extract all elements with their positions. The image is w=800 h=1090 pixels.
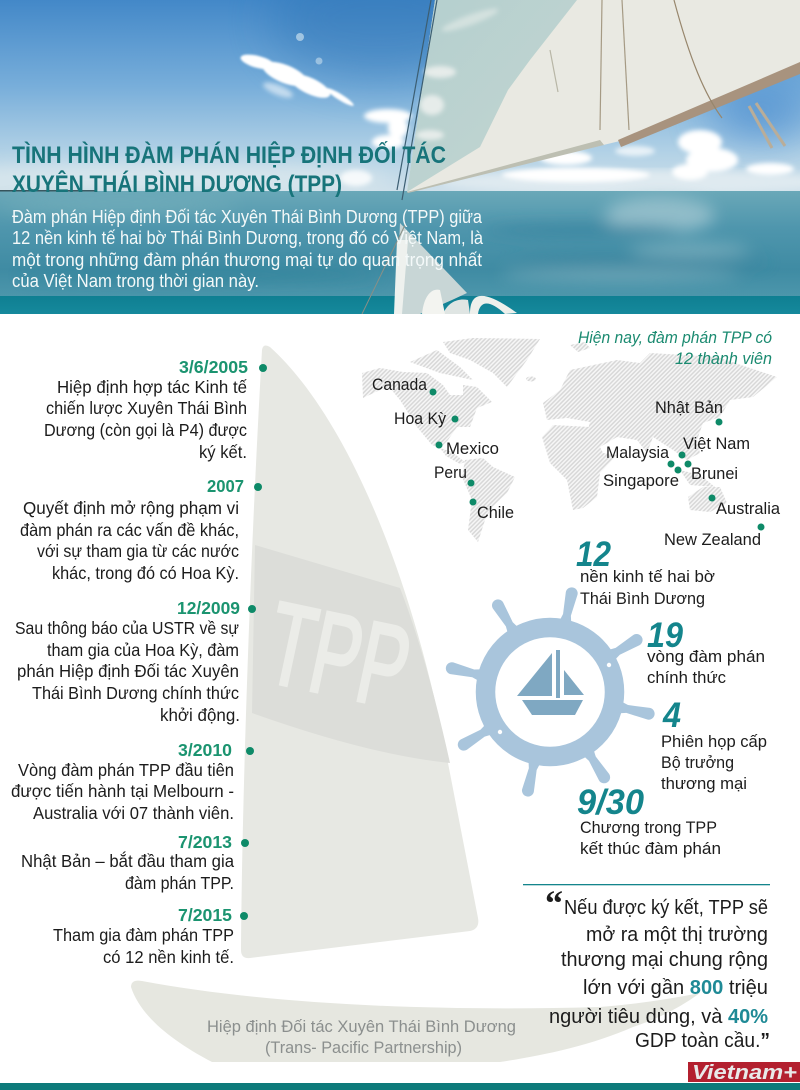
quote: thương mại chung rộng (561, 948, 768, 971)
stat 12: Thái Bình Dương (580, 589, 705, 608)
map labels: Mexico (446, 439, 499, 458)
stat 19: vòng đàm phán (647, 647, 765, 666)
stat 4 (661, 696, 767, 793)
event 2015: Tham gia đàm phán TPP (53, 925, 234, 945)
logo: Vietnam+: Vietnam+ (692, 1062, 797, 1084)
intro text: của Việt Nam trong thời gian này. (12, 270, 259, 291)
title: XUYÊN THÁI BÌNH DƯƠNG (TPP) (12, 170, 342, 198)
map labels: Canada (372, 375, 427, 394)
stat 4: 4 (662, 696, 681, 735)
event 2007: Quyết định mở rộng phạm vi (23, 498, 239, 518)
event 2010 (11, 740, 254, 823)
timeline (11, 357, 267, 967)
event 2015: 7/2015 (178, 905, 232, 925)
event 2013: 7/2013 (178, 832, 232, 852)
map labels: Australia (716, 499, 781, 518)
quote: lớn với gần 800 triệu (583, 976, 768, 999)
map dots (430, 388, 764, 530)
footer bar (0, 1083, 800, 1090)
boat deck (362, 223, 517, 314)
stat 9/30: kết thúc đàm phán (580, 839, 721, 858)
map labels: Malaysia (606, 443, 669, 462)
map labels: Nhật Bản (655, 398, 723, 417)
map heading: Hiện nay, đàm phán TPP có (578, 328, 772, 347)
map labels: Peru (434, 463, 467, 482)
event 2005: Hiệp định hợp tác Kinh tế (57, 377, 247, 397)
event 2009 (15, 598, 256, 725)
event 2013: đàm phán TPP. (125, 873, 234, 893)
quote: người tiêu dùng, và 40% (549, 1005, 768, 1028)
intro text: Đàm phán Hiệp định Đối tác Xuyên Thái Bình Dương (TPP) giữa (12, 206, 483, 227)
map heading: 12 thành viên (675, 349, 772, 368)
event 2007 (20, 476, 262, 583)
map labels (372, 375, 781, 549)
event 2009: Sau thông báo của USTR về sự (15, 618, 239, 638)
sail caption: (Trans- Pacific Partnership) (265, 1038, 462, 1057)
event 2009: phán Hiệp định Đối tác Xuyên (17, 661, 239, 681)
map heading (578, 328, 772, 368)
stat 9/30: 9/30 (577, 783, 645, 822)
world map (362, 338, 777, 542)
map labels: Singapore (603, 471, 679, 490)
map labels: Hoa Kỳ (394, 409, 446, 428)
intro text: một trong những đàm phán thương mại tự do quan trọng nhất (12, 249, 482, 270)
stat 12 (576, 535, 715, 608)
stat 4: Bộ trưởng (661, 753, 734, 772)
sail caption (207, 1017, 516, 1057)
stat 9/30 (577, 783, 721, 858)
intro text: 12 nền kinh tế hai bờ Thái Bình Dương, trong đó có Việt Nam, là (12, 227, 484, 248)
quote: “ (545, 883, 563, 923)
map labels: Việt Nam (683, 434, 750, 453)
event 2007: với sự tham gia từ các nước (37, 541, 239, 561)
quote (523, 883, 770, 1052)
sail in photo (397, 0, 800, 200)
event 2009: Thái Bình Dương chính thức (32, 683, 239, 703)
quote: Nếu được ký kết, TPP sẽ (564, 896, 768, 919)
event 2015 (53, 905, 248, 967)
stat 4: Phiên họp cấp (661, 732, 767, 751)
event 2010: Australia với 07 thành viên. (33, 803, 234, 823)
stat 12: 12 (576, 535, 611, 574)
event 2007: 2007 (207, 476, 244, 496)
intro text (12, 206, 484, 291)
map labels: New Zealand (664, 530, 761, 549)
event 2013 (21, 832, 249, 893)
hull graphic (131, 981, 700, 1062)
event 2007: khác, trong đó có Hoa Kỳ. (52, 563, 239, 583)
stat 19: chính thức (647, 668, 726, 687)
sail graphic (241, 346, 478, 958)
event 2007: đàm phán ra các vấn đề khác, (20, 520, 239, 540)
stat 9/30: Chương trong TPP (580, 818, 717, 837)
event 2005: 3/6/2005 (179, 357, 248, 377)
title (12, 141, 446, 198)
event 2013: Nhật Bản – bắt đầu tham gia (21, 850, 234, 871)
stat 4: thương mại (661, 774, 747, 793)
event 2010: được tiến hành tại Melbourn - (11, 781, 234, 801)
ship wheel (444, 586, 656, 798)
event 2005: Dương (còn gọi là P4) được (44, 420, 247, 440)
icon: sailboat (517, 650, 584, 715)
event 2009: 12/2009 (177, 598, 240, 618)
stat 12: nền kinh tế hai bờ (580, 567, 715, 586)
map labels: Brunei (691, 464, 738, 483)
event 2009: tham gia của Hoa Kỳ, đàm (47, 640, 239, 660)
stat 19 (647, 616, 765, 687)
stat 19: 19 (647, 616, 683, 655)
sail caption: Hiệp định Đối tác Xuyên Thái Bình Dương (207, 1017, 516, 1036)
event 2010: Vòng đàm phán TPP đầu tiên (18, 760, 234, 780)
quote: GDP toàn cầu.” (635, 1029, 770, 1052)
event 2005 (44, 357, 267, 462)
event 2009: khởi động. (160, 705, 240, 725)
event 2010: 3/2010 (178, 740, 232, 760)
header photo (0, 0, 800, 314)
event 2005: ký kết. (199, 442, 247, 462)
TPP sail text: TPP (257, 577, 421, 734)
event 2015: có 12 nền kinh tế. (103, 947, 234, 967)
map labels: Chile (477, 503, 514, 522)
title: TÌNH HÌNH ĐÀM PHÁN HIỆP ĐỊNH ĐỐI TÁC (12, 141, 446, 169)
event 2005: chiến lược Xuyên Thái Bình (46, 398, 247, 418)
quote: mở ra một thị trường (586, 923, 768, 946)
